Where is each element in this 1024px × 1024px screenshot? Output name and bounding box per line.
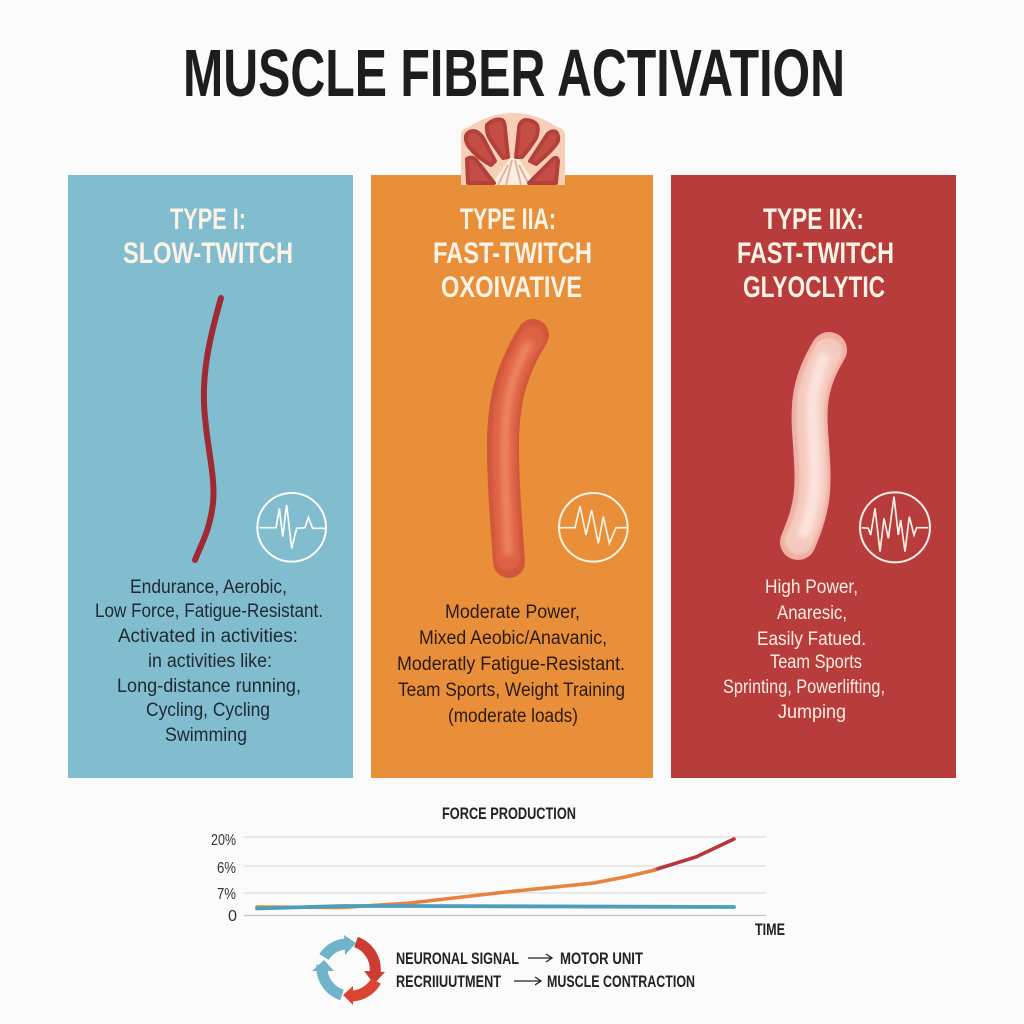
text: Type I description: Long-distance running, [117, 676, 301, 697]
text: Type I description: Activated in activities: [118, 626, 298, 647]
icon: thick pale glycolytic fiber [798, 350, 829, 542]
y-axis labels: 6% [217, 860, 236, 877]
text: recruitment pathway [396, 949, 695, 991]
text: Type IIX description: Jumping [778, 702, 846, 723]
text: Type IIX description: Easily Fatued. [757, 629, 866, 650]
text: Type IIA description: Mixed Aeobic/Anavanic, [419, 628, 607, 649]
text: Type I description: Cycling, Cycling [146, 700, 270, 721]
text: Type I description: in activities like: [148, 651, 272, 672]
text: recruitment pathway: RECRIIUUTMENT [396, 972, 501, 991]
y-axis labels [211, 832, 237, 925]
chart: force production over time [211, 804, 785, 939]
text: recruitment pathway: NEURONAL SIGNAL [396, 949, 519, 968]
text: Type IIX description [723, 577, 885, 723]
text: Type IIX description: High Power, [765, 577, 858, 598]
icon: activation signal, low [257, 493, 326, 562]
text: Type I description: Endurance, Aerobic, [130, 577, 287, 598]
heading: Type IIA: FAST-TWITCH [433, 237, 592, 270]
text: Type IIA description: Team Sports, Weight Training [398, 680, 625, 701]
text: Type I description: Low Force, Fatigue-Resistant. [95, 601, 323, 622]
heading: Type IIX: GLYOCLYTIC [743, 271, 885, 304]
text: Type IIX description: Anaresic, [777, 603, 847, 624]
panel: Type I slow-twitch [68, 175, 353, 778]
line: Type I blue [257, 906, 734, 908]
icon: medium fast-twitch oxidative fiber [503, 335, 533, 562]
text: recruitment pathway: MOTOR UNIT [560, 949, 643, 968]
icon: thin slow-twitch fiber [195, 298, 221, 560]
y-axis labels: 0 [228, 908, 237, 925]
arrow: signal to motor unit [528, 954, 552, 962]
y-axis labels: 7% [217, 886, 236, 903]
text: Type IIX description: Team Sports [770, 652, 862, 673]
heading: Type I: SLOW-TWITCH [123, 237, 293, 270]
heading: Type IIX: FAST-TWITCH [737, 237, 894, 270]
panel: Type IIX fast-twitch glycolytic [671, 175, 956, 778]
heading: Type IIA: OXOIVATIVE [441, 271, 582, 304]
panel: Type IIA fast-twitch oxidative [371, 175, 653, 778]
text: recruitment pathway: MUSCLE CONTRACTION [547, 972, 695, 991]
text: Type IIA description: Moderate Power, [445, 602, 580, 623]
y-axis labels: 20% [211, 832, 236, 849]
icon: muscle cross-section [461, 113, 565, 185]
line: Type IIX red [654, 839, 734, 870]
heading: Type IIX [737, 203, 894, 304]
heading: Type IIA [433, 203, 592, 304]
text: Type I description [95, 577, 323, 746]
heading: Type IIX: TYPE IIX: [763, 203, 864, 236]
arrow: recruitment to contraction [514, 977, 541, 985]
text: Type IIA description: Moderatly Fatigue-Resistant. [397, 654, 625, 675]
chart title: FORCE PRODUCTION [442, 804, 576, 823]
text: Type IIA description [397, 602, 625, 727]
icon: recruitment cycle arrows [312, 935, 385, 1005]
text: Type IIA description: (moderate loads) [448, 706, 578, 727]
heading: Type IIA: TYPE IIA: [460, 203, 556, 236]
line: Type IIA orange [257, 870, 655, 908]
heading: Type I [123, 203, 293, 270]
text: Type I description: Swimming [165, 725, 247, 746]
icon: activation signal, moderate [559, 493, 628, 562]
icon: activation signal, high [860, 492, 930, 562]
text: Type IIX description: Sprinting, Powerlifting, [723, 677, 885, 698]
heading: Type I: TYPE I: [170, 203, 246, 236]
x-axis label: TIME [755, 920, 785, 939]
